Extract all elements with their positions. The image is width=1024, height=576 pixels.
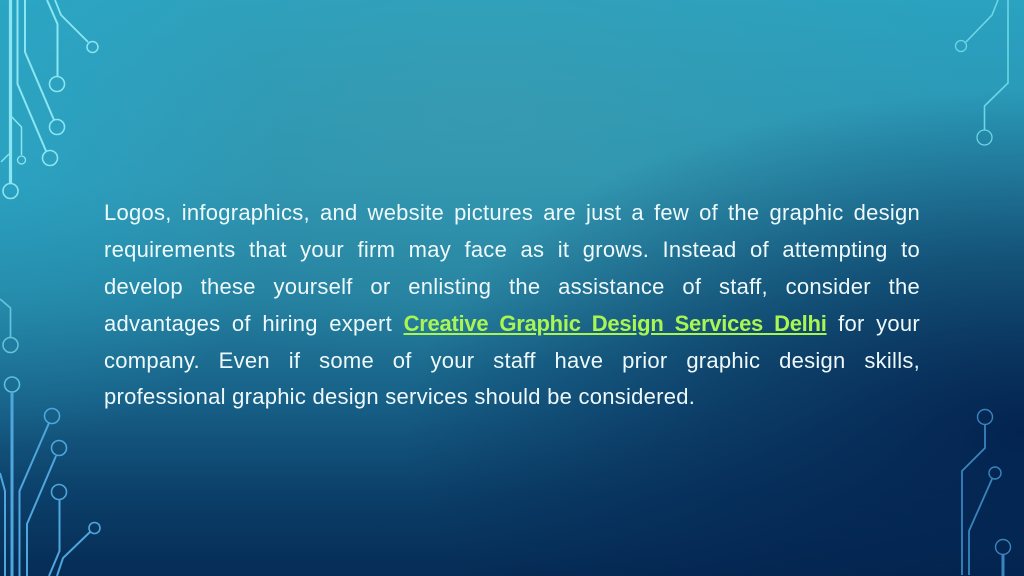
circuit: bottom left bbox=[0, 377, 100, 576]
body paragraph: Logos, infographics, and website pictures are just a few of the graphic design bbox=[104, 200, 920, 225]
circuit: top left bbox=[1, 0, 98, 198]
body paragraph: requirements that your firm may face as it grows. Instead of attempting to bbox=[104, 237, 920, 262]
body paragraph bbox=[104, 200, 920, 409]
circuit: top right bbox=[956, 0, 1008, 145]
body paragraph: advantages of hiring expert Creative Graphic Design Services Delhi for your bbox=[104, 311, 920, 336]
body paragraph: company. Even if some of your staff have prior graphic design skills, bbox=[104, 348, 920, 373]
body paragraph: professional graphic design services should be considered. bbox=[104, 384, 695, 409]
circuit: bottom right bbox=[962, 410, 1010, 576]
circuit: left middle bbox=[0, 299, 18, 352]
body paragraph: develop these yourself or enlisting the assistance of staff, consider the bbox=[104, 274, 920, 299]
